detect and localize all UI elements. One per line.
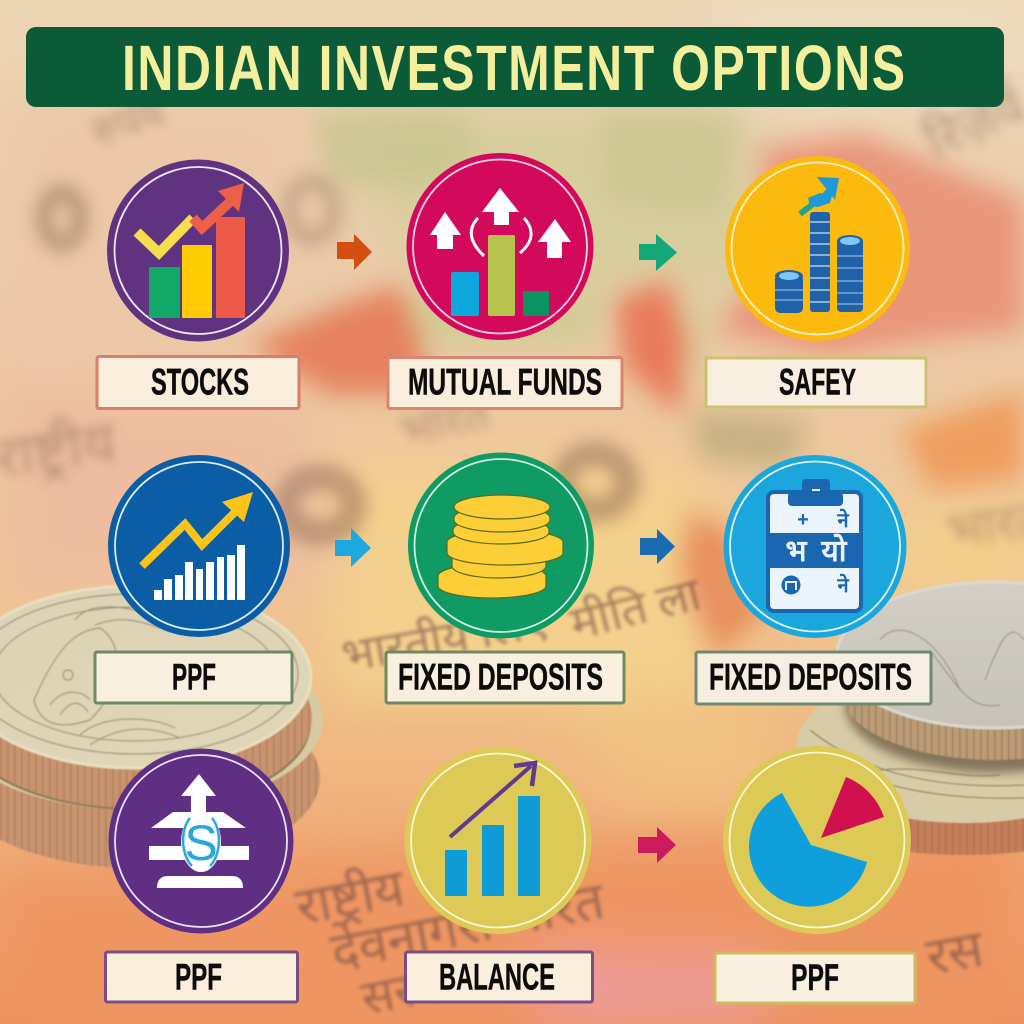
- panel: ppf growth icon: [108, 455, 290, 637]
- panel: ppf dollar icon: S: [184, 815, 218, 871]
- panel: clipboard icon: +: [797, 509, 809, 531]
- arrow: balance to ppf: [638, 827, 676, 863]
- panel: clipboard icon: यो: [820, 533, 848, 569]
- background: blurred rupee note and map: रुपये: [85, 87, 171, 157]
- label: mutual funds: [388, 358, 622, 408]
- panel: balance chart icon: [404, 747, 592, 934]
- coin stack right: [797, 582, 1024, 855]
- arrow: mutual funds to safety: [639, 234, 677, 271]
- label: fixed deposits two: [696, 652, 931, 704]
- background: blurred rupee note and map: भारत: [395, 386, 495, 458]
- background: blurred rupee note and map: भारतीय लिए: [338, 594, 553, 682]
- arrow: stocks to mutual funds: [337, 234, 372, 270]
- panel: clipboard icon: ने: [836, 573, 849, 597]
- label: balance: BALANCE: [439, 956, 555, 998]
- background: blurred rupee note and map: देवनागरी भारत: [326, 871, 610, 982]
- label: safey: [706, 358, 926, 407]
- label: fixed deposits two: FIXED DEPOSITS: [709, 656, 912, 698]
- label: ppf row two: PPF: [172, 656, 216, 698]
- panel: ppf dollar icon: [108, 748, 294, 934]
- panel: mutual funds icon: [406, 153, 594, 340]
- label: stocks: [97, 356, 299, 408]
- background: blurred rupee note and map: राष्ट्रीय बैंक की: [291, 829, 557, 937]
- label: stocks: STOCKS: [151, 362, 249, 402]
- label: ppf row three left: PPF: [175, 956, 222, 998]
- background: blurred rupee note and map: रस: [922, 921, 988, 987]
- panel: clipboard icon: भ: [785, 534, 808, 569]
- background: blurred rupee note and map: सरकार: [357, 950, 487, 1024]
- label: ppf row three right: PPF: [791, 957, 839, 998]
- coin stack left: [0, 586, 323, 868]
- panel: fixed deposits coins icon: [408, 452, 594, 638]
- background: blurred rupee note and map: मीति ला: [565, 567, 707, 650]
- label: ppf row three left: [106, 952, 298, 1002]
- label: mutual funds: MUTUAL FUNDS: [408, 362, 602, 402]
- panel: safety icon: [725, 156, 910, 341]
- label: safey: SAFEY: [779, 362, 856, 402]
- arrow: fixed deposits to clipboard: [640, 529, 675, 564]
- arrow: ppf to fixed deposits: [335, 528, 371, 567]
- panel: pie chart icon: [723, 746, 911, 934]
- label: ppf row three right: [715, 953, 915, 1003]
- label: balance: [406, 952, 592, 1002]
- label: fixed deposits one: FIXED DEPOSITS: [398, 656, 603, 698]
- label: ppf row two: [95, 652, 292, 703]
- panel: clipboard icon: [724, 455, 906, 638]
- title banner: [26, 27, 1004, 107]
- title text: INDIAN INVESTMENT OPTIONS: [122, 33, 905, 104]
- panel: stocks icon: [107, 160, 289, 342]
- panel: clipboard icon: ने: [836, 508, 849, 532]
- label: fixed deposits one: [386, 652, 624, 703]
